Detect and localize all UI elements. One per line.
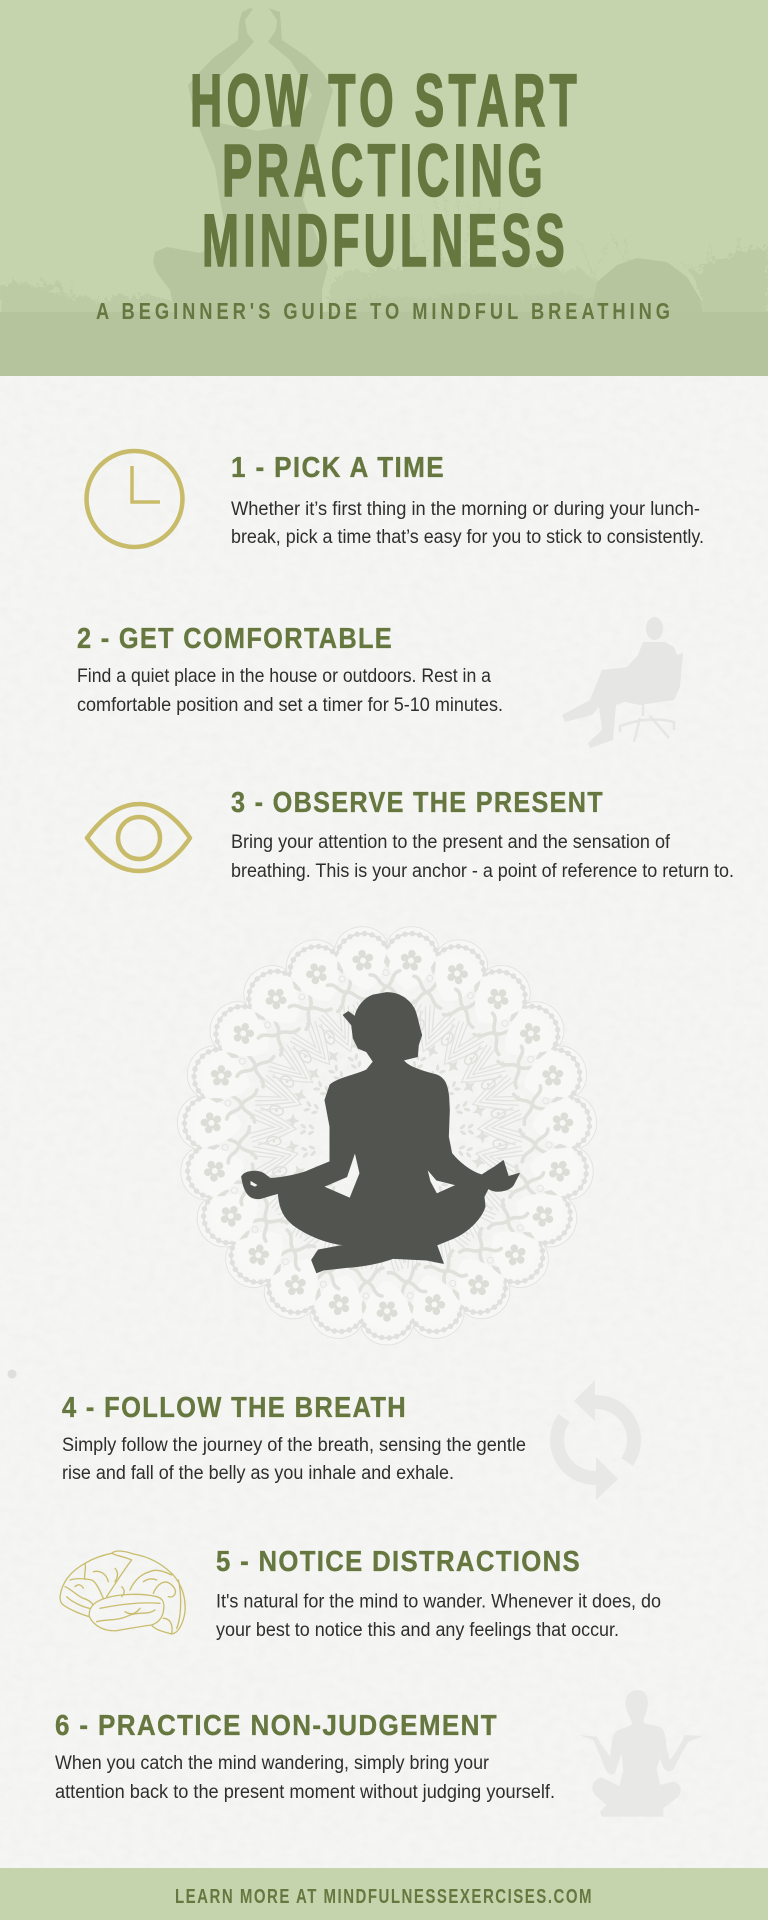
grass: left	[0, 238, 768, 330]
mound	[590, 258, 704, 323]
meditating figure	[242, 993, 519, 1273]
step 3: breathing. This is your anchor - a point of reference to return to.	[231, 861, 734, 882]
step 5: 5 - NOTICE DISTRACTIONS	[216, 1546, 581, 1578]
grass: middle	[326, 195, 628, 315]
step 3	[231, 787, 734, 882]
icon: clock	[86, 451, 182, 547]
icon: person in office chair	[562, 617, 683, 748]
step 4: rise and fall of the belly as you inhale and exhale.	[62, 1463, 454, 1484]
step 3: 3 - OBSERVE THE PRESENT	[231, 787, 604, 819]
title: PRACTICING	[222, 129, 547, 212]
step 5	[216, 1546, 661, 1641]
header banner	[0, 0, 768, 376]
step 2: Find a quiet place in the house or outdoors. Rest in a	[77, 666, 491, 687]
meditating figure silhouette in header	[153, 8, 333, 315]
step 1	[231, 452, 704, 548]
icon: eye	[87, 804, 190, 871]
step 2: 2 - GET COMFORTABLE	[77, 623, 393, 655]
step 6	[55, 1710, 555, 1803]
step 4: 4 - FOLLOW THE BREATH	[62, 1392, 407, 1424]
mandala	[174, 922, 599, 1347]
step 6: attention back to the present moment without judging yourself.	[55, 1782, 555, 1803]
ground band	[0, 312, 768, 376]
footer text: LEARN MORE AT MINDFULNESSEXERCISES.COM	[175, 1886, 593, 1908]
icon: refresh arrows	[557, 1380, 634, 1500]
step 6: 6 - PRACTICE NON-JUDGEMENT	[55, 1710, 498, 1742]
step 4: Simply follow the journey of the breath, sensing the gentle	[62, 1435, 526, 1456]
step 1: 1 - PICK A TIME	[231, 452, 445, 484]
step 1: break, pick a time that’s easy for you to stick to consistently.	[231, 527, 704, 548]
paper background	[0, 376, 768, 1868]
grass: right	[688, 246, 768, 330]
step 3: Bring your attention to the present and the sensation of	[231, 832, 671, 853]
icon: shrugging meditator	[578, 1690, 703, 1817]
step 1: Whether it’s first thing in the morning or during your lunch-	[231, 499, 700, 520]
title	[190, 59, 581, 282]
step 5: It's natural for the mind to wander. Whenever it does, do	[216, 1592, 661, 1612]
step 2	[77, 623, 503, 716]
step 2: comfortable position and set a timer for 5-10 minutes.	[77, 695, 503, 716]
step 4	[62, 1392, 526, 1484]
icon: brain	[60, 1551, 185, 1634]
step 5: your best to notice this and any feelings that occur.	[216, 1620, 619, 1641]
step 6: When you catch the mind wandering, simply bring your	[55, 1753, 490, 1774]
footer bar	[0, 1868, 768, 1920]
